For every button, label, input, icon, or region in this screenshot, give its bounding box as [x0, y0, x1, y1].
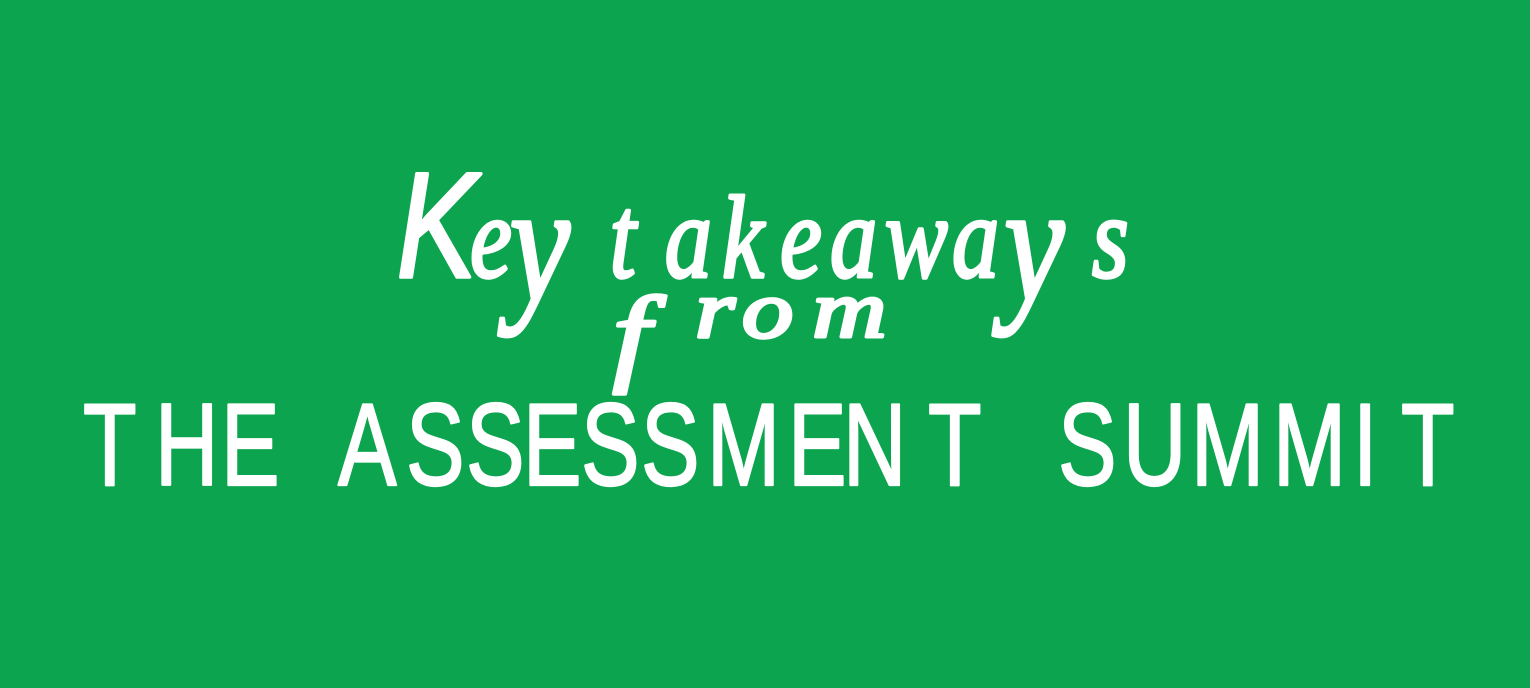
title: from: f — [613, 276, 667, 395]
title: The Assessment Summit: THE ASSESSMENT SUMMIT — [83, 379, 1455, 510]
title: Key takeaways: y — [993, 150, 1065, 338]
title: Key takeaways: K — [397, 141, 482, 309]
title: Key takeaways: y — [498, 150, 571, 338]
title: Key takeaways: e — [470, 173, 512, 304]
title: Key takeaways: s — [1092, 173, 1129, 304]
title: Key takeaways: takeawa — [584, 173, 999, 304]
title: from: rom — [695, 265, 887, 356]
